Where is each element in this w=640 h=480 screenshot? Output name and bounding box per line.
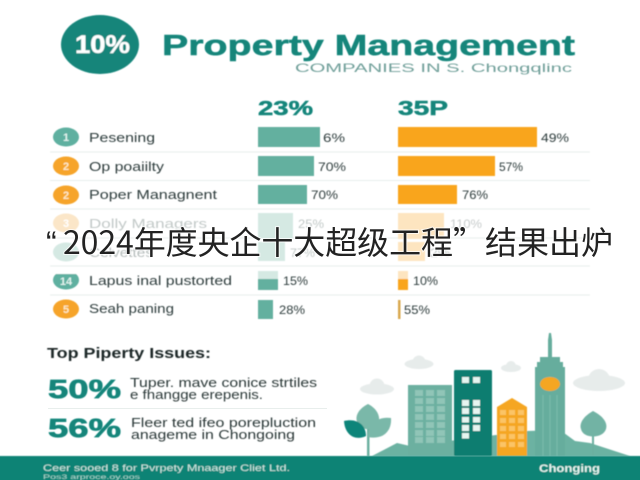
row 5 (faded) <box>53 242 450 262</box>
stat: 56% <box>48 413 316 443</box>
banner headline: “ <box>46 225 57 261</box>
stat: 56%: anageme in Chongoing <box>131 428 295 442</box>
heading: top issues: Top Piperty Issues: <box>47 346 211 362</box>
row 6: 15% <box>283 276 308 288</box>
building: orange <box>497 398 527 456</box>
footer band <box>0 456 640 480</box>
clouds <box>360 356 625 394</box>
stat: 50%: 50% <box>48 374 121 404</box>
tree right <box>581 411 606 456</box>
row 3: 76% <box>462 190 488 202</box>
row 6: 10% <box>413 276 438 288</box>
stat: 50%: Tuper. mave conice strtiles <box>130 376 317 390</box>
building: dark teal <box>454 370 492 456</box>
row 4 (faded): 3 <box>63 218 69 230</box>
tree left <box>344 404 391 456</box>
footer city label: Chonging <box>539 463 600 475</box>
stat: 56%: 56% <box>48 413 121 443</box>
title: COMPANIES IN S. Chongqlinc <box>295 61 572 75</box>
row 1: Pesening <box>89 131 155 145</box>
row 3 <box>53 185 488 204</box>
stat: 50% <box>48 374 317 404</box>
row 1 <box>53 127 569 147</box>
badge: 10% <box>61 15 139 74</box>
column heading: 35P: 35P <box>398 98 448 120</box>
row 7 <box>53 300 430 319</box>
banner headline: 2024年度央企十大超级工程 <box>63 218 453 264</box>
badge: 10%: 10% <box>75 31 130 59</box>
row 1: 49% <box>541 133 569 145</box>
row 4 (faded) <box>53 213 482 239</box>
illustration: city skyline <box>344 333 630 456</box>
row 5 (faded): 2% <box>430 248 450 260</box>
stat: 50%: e fhangge erepenis. <box>130 388 263 402</box>
row 5 (faded): 77% <box>290 248 315 260</box>
row 7: Seah paning <box>89 302 174 316</box>
row 6: Lapus inal pustorted <box>89 274 232 288</box>
row 3: Poper Managnent <box>89 188 218 202</box>
row 2: 2 <box>63 161 69 173</box>
title <box>162 30 575 75</box>
row 2: 70% <box>318 162 346 174</box>
banner headline: ” <box>453 218 485 264</box>
row 2 <box>53 156 523 176</box>
banner headline: 结果出炉 <box>485 218 613 264</box>
building: grey-green <box>408 385 452 456</box>
row 3: 2 <box>63 190 69 202</box>
row 2: Op poaiilty <box>89 160 165 174</box>
column heading: 23%: 23% <box>258 98 313 120</box>
row 7: 55% <box>404 305 430 317</box>
row 4 (faded): 25% <box>298 219 324 231</box>
footer text: Ceer sooed 8 for Pvrpety Mnaager Cliet Ltd. <box>43 463 290 474</box>
row 2: 57% <box>499 162 523 174</box>
row 4 (faded): Dolly Managers <box>89 217 207 231</box>
row 6 <box>50 268 438 290</box>
row 1: 1 <box>63 132 69 144</box>
row 3: 70% <box>311 190 338 202</box>
banner headline <box>46 218 613 264</box>
table rows: bars and labels <box>50 127 590 319</box>
tower <box>535 333 565 456</box>
row 7: 5 <box>63 304 69 316</box>
hills <box>372 430 630 456</box>
row 4 (faded): 110% <box>450 219 482 231</box>
row 7: 28% <box>279 305 305 317</box>
row 5 (faded): Celvettes <box>89 246 153 260</box>
row 1: 6% <box>323 133 345 145</box>
stat: 56%: Fleer ted ifeo porepluction <box>131 416 316 430</box>
title: Property Management <box>162 30 575 62</box>
row 6: 14 <box>60 276 73 288</box>
